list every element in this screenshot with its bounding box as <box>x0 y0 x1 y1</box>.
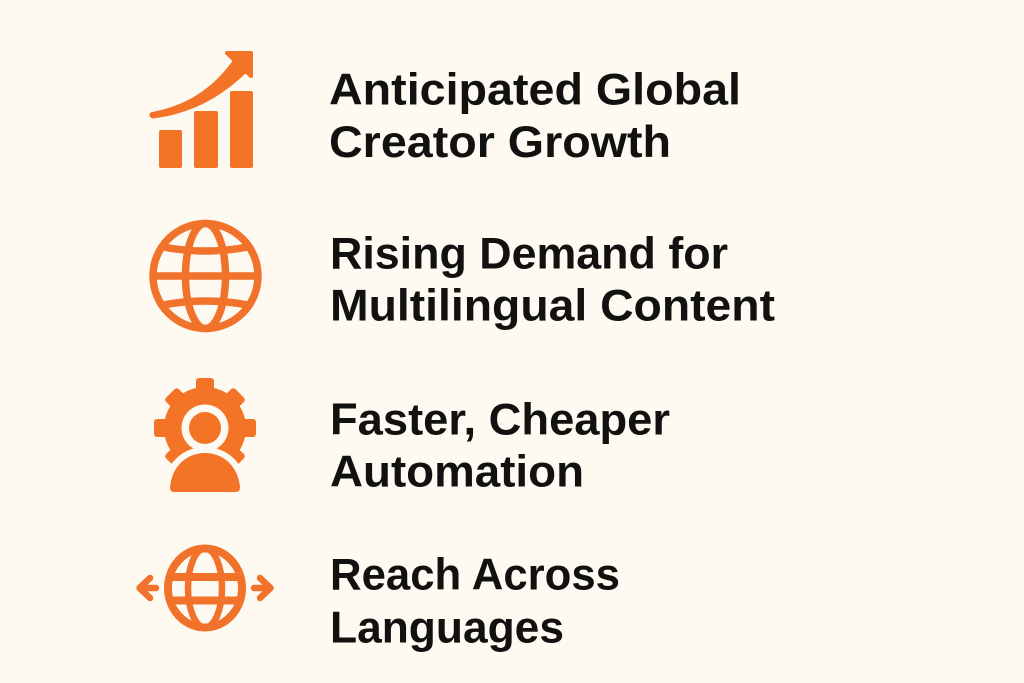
row 4: reach across languages <box>140 548 620 652</box>
row 1: creator growth <box>149 53 741 168</box>
heading: Reach Across Languages: Languages <box>330 604 564 652</box>
heading: Faster, Cheaper Automation: Faster, Cheaper <box>330 396 670 444</box>
icon: globe with side arrows <box>140 548 270 628</box>
icon: globe <box>153 224 258 328</box>
heading: Reach Across Languages <box>330 550 620 652</box>
heading: Reach Across Languages: Reach Across <box>330 550 620 600</box>
row 2: multilingual demand <box>153 224 775 330</box>
heading: Anticipated Global Creator Growth: Anticipated Global <box>329 66 741 114</box>
row 3: automation <box>154 378 670 498</box>
heading: Anticipated Global Creator Growth: Creator Growth <box>329 118 671 167</box>
heading: Rising Demand for Multilingual Content: Multilingual Content <box>330 282 775 330</box>
heading: Rising Demand for Multilingual Content <box>330 230 775 330</box>
heading: Faster, Cheaper Automation: Automation <box>330 448 584 496</box>
heading: Faster, Cheaper Automation <box>330 396 670 496</box>
heading: Rising Demand for Multilingual Content: Rising Demand for <box>330 230 728 278</box>
icon: rising bar chart with arrow <box>149 53 253 168</box>
heading: Anticipated Global Creator Growth <box>329 66 741 167</box>
icon: gear with person <box>154 378 256 498</box>
